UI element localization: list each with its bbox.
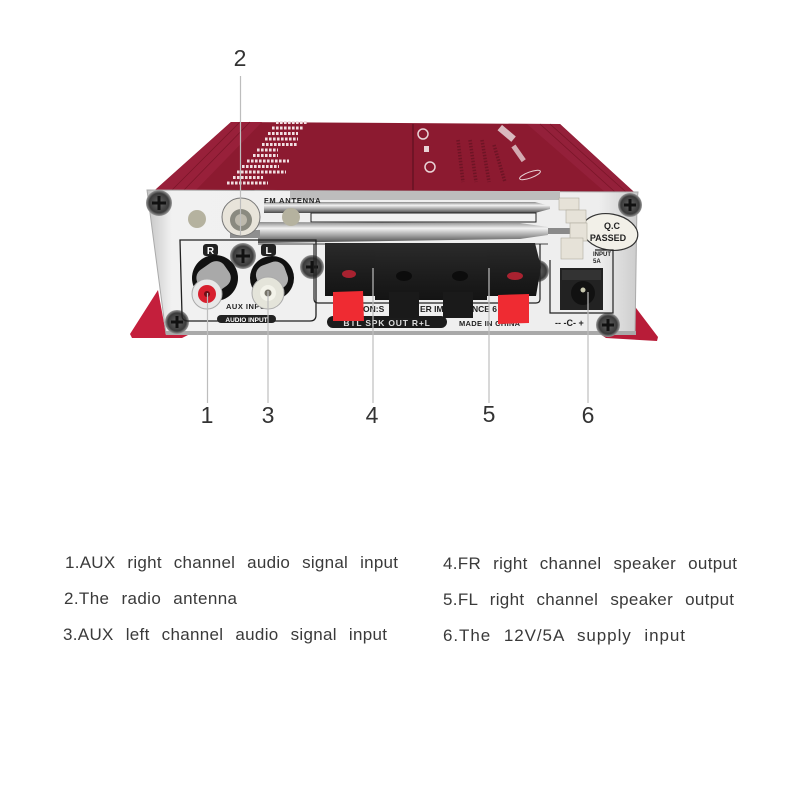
- audio input block: AUDIO INPUT: [225, 317, 268, 324]
- callout numbers: 3: [262, 402, 274, 428]
- legend: right column: [443, 554, 737, 645]
- black levers: [389, 292, 419, 318]
- callout numbers: 6: [582, 402, 594, 428]
- speaker terminal block: [314, 243, 541, 328]
- legend: left column: 1.AUX right channel audio signal input: [65, 553, 398, 572]
- legend: left column: 2.The radio antenna: [64, 589, 238, 608]
- silver front plate: [147, 190, 638, 334]
- right red mounting flange: [600, 296, 658, 341]
- FM ANTENNA label: FM ANTENNA: [264, 196, 321, 205]
- QC passed sticker: PASSED: [590, 233, 627, 243]
- black terminals: [325, 243, 375, 296]
- callout numbers: [201, 45, 594, 428]
- printed logos on top panel: [418, 125, 541, 182]
- audio input block: [180, 240, 316, 324]
- antenna socket: [222, 198, 260, 236]
- top red panel: [155, 122, 634, 192]
- legend: right column: 4.FR right channel speaker output: [443, 554, 737, 573]
- left RCA jack: [250, 256, 294, 309]
- L badge: [261, 244, 276, 256]
- front plate screws: [146, 190, 642, 337]
- callout numbers: 2: [234, 45, 246, 71]
- antenna clips: [559, 198, 587, 259]
- red levers: [333, 291, 364, 321]
- audio input block: R: [207, 246, 215, 257]
- AUDIO INPUT label: [217, 315, 276, 323]
- power input socket: 5A: [593, 259, 601, 265]
- audio input block: L: [265, 246, 272, 257]
- terminal holes: [342, 270, 356, 278]
- AUX INPUT label: AUX INPU: [226, 302, 266, 311]
- legend: right column: 6.The 12V/5A supply input: [443, 626, 685, 645]
- legend: right column: 5.FL right channel speaker output: [443, 590, 734, 609]
- callout numbers: 1: [201, 402, 213, 428]
- legend: left column: 3.AUX left channel audio signal input: [63, 625, 387, 644]
- callout numbers: 4: [366, 402, 379, 428]
- input rating label: INPUT: [593, 252, 611, 258]
- BTL SPK OUT label: [327, 316, 447, 328]
- speaker terminal block: BTL SPK OUT R+L: [343, 318, 431, 328]
- impedance label: ER IM: [420, 304, 444, 314]
- R badge: [203, 244, 218, 256]
- QC passed sticker: [579, 209, 641, 255]
- vent dot pattern: [227, 122, 307, 183]
- power input socket: [550, 250, 613, 328]
- impedance label: NCE 6: [472, 304, 497, 314]
- left red mounting flange: [130, 290, 188, 338]
- polarity symbol: -- -C- +: [555, 318, 584, 328]
- MADE IN CHINA label: MADE IN CHINA: [459, 319, 521, 328]
- callout numbers: 5: [483, 401, 495, 427]
- amplifier device: [130, 122, 658, 341]
- callout leader lines: [208, 76, 588, 403]
- QC passed sticker: Q.C: [604, 221, 620, 231]
- legend: left column: [63, 553, 398, 644]
- impedance label: ON:S: [363, 304, 385, 314]
- right RCA jack: [192, 255, 238, 309]
- antenna rods: [230, 202, 574, 245]
